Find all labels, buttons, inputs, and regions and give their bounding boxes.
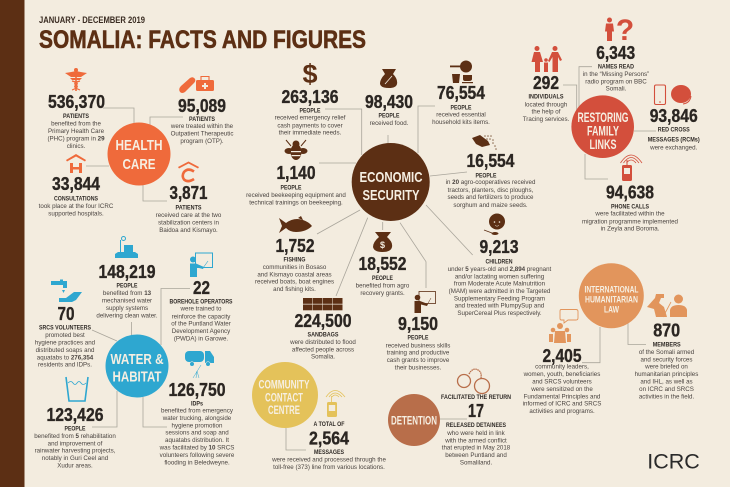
icon: phone and speech bubbles [654, 85, 691, 104]
stat: 9,213 children: from Moderate Acute Malnutrition [454, 281, 546, 288]
stat: 93,846 red cross messages: were exchanged. [649, 145, 698, 152]
icon: sandbags [303, 298, 342, 310]
stat: 22 borehole operators: were trained to [180, 306, 222, 313]
stat: 16,554 people: seeds and fertilizers to produce [448, 194, 534, 201]
stat: 2,405 community leaders: 2,405 [542, 346, 582, 366]
stat: 2,405 community leaders: women, youth, beneficiaries [523, 371, 600, 378]
stat: 1,752 fishing: 1,752 [276, 236, 314, 256]
stat: 870 members: and security forces [641, 356, 692, 363]
stat: 18,552 people: benefited from agro [356, 283, 410, 290]
stat: 16,554 people: sorghum and maize seeds. [453, 202, 528, 209]
stat: 536,370 patients [47, 92, 105, 150]
stat: 17 released detainees: who were held in link [446, 430, 506, 437]
stat: 870 members: 870 [653, 320, 680, 340]
stat: 536,370 patients: Primary Health Care [48, 128, 105, 135]
stat: 148,219 people: PEOPLE [116, 282, 138, 290]
stat: 536,370 patients: (PHC) program in 29 [47, 136, 105, 142]
stat: 870 members: on ICRC and SRCS [639, 386, 694, 393]
stat: 93,846 red cross messages: 93,846 [650, 106, 698, 126]
stat: 1,752 fishing: received boats, boat engines [255, 279, 334, 286]
stat: 2,405 community leaders: community leaders, [535, 364, 589, 371]
stat: 9,213 children: CHILDREN [486, 258, 513, 266]
stat: 126,750 IDPs: volunteers following severe [160, 452, 235, 459]
stat: 3,871 patients: PATIENTS [176, 204, 202, 212]
stat: 9,213 children: (MAM) were admitted in the Targeted [449, 288, 551, 295]
stat: 870 members: activities in the field. [639, 393, 694, 400]
stat: 94,638 phone calls: migration programme implemented [582, 218, 679, 225]
icon: mobile phone signal [326, 390, 345, 417]
panel: detention [388, 369, 511, 467]
stat: 536,370 patients: 536,370 [48, 92, 105, 112]
stat: 1,752 fishing [255, 236, 334, 293]
stat: 3,871 patients: 3,871 [170, 183, 208, 203]
stat: 16,554 people: PEOPLE [476, 172, 497, 180]
icon: tap and hand [51, 280, 82, 302]
stat: 9,213 children: and/or lactating women suffering [455, 273, 545, 280]
stat: 76,554 people: household kits items. [432, 119, 490, 126]
community contact centre circle: CONTACT [265, 390, 303, 404]
icon: trainer at board [190, 253, 212, 277]
stat: 536,370 patients: benefited from the [51, 120, 101, 128]
stat: 2,405 community leaders: Fundamental Principles and [524, 393, 601, 400]
stat: 263,136 people: 263,136 [282, 87, 338, 107]
stat: 2,564 messages: toll-free (373) line from various locations. [273, 464, 385, 471]
stat: 94,638 phone calls: were facilitated within the [594, 211, 665, 218]
restoring family links circle [571, 95, 634, 158]
stat: 95,089 patients: program (OTP). [180, 138, 224, 145]
ICRC logo text: ICRC [647, 450, 700, 474]
icon: business trainer [414, 292, 436, 313]
water and habitat circle: HABITAT [112, 370, 162, 386]
stat: 9,213 children: Supplementary Feeding Program [454, 295, 545, 302]
icon: hospital H [66, 154, 86, 173]
economic security circle [352, 143, 430, 221]
stat: 148,219 people: 148,219 [98, 262, 156, 282]
stat: 70 SRCS volunteers: promoted best [45, 332, 85, 339]
panel: economic security [246, 59, 552, 371]
stat: 1,140 people: received beekeeping equipment and [246, 192, 346, 199]
stat: 123,426 people: PEOPLE [64, 426, 86, 432]
stat: 16,554 people: 16,554 [466, 151, 514, 171]
stat: 2,405 community leaders: informed of ICRC and SRCS [523, 401, 601, 408]
stat: 70 SRCS volunteers: aquatabs to 276,354 [37, 354, 94, 361]
stat: 1,140 people: 1,140 [276, 163, 316, 183]
restoring family links circle: RESTORING [578, 110, 628, 125]
stat: 148,219 people: mechanised water [102, 298, 152, 305]
stat: 93,846 red cross messages: MESSAGES (RCMs) [648, 136, 700, 144]
stat: 22 borehole operators [170, 278, 233, 342]
stat: 870 members: humanitarian principles [635, 371, 698, 378]
icon: fish [279, 216, 312, 233]
stat: 3,871 patients: received care at the two [156, 212, 222, 219]
stat: 22 borehole operators: BOREHOLE OPERATORS [170, 298, 233, 306]
stat: 126,750 IDPs [159, 380, 235, 466]
stat: 70 SRCS volunteers [35, 304, 96, 369]
stat: 22 borehole operators: of the Puntland Water [171, 321, 231, 328]
international humanitarian law circle: INTERNATIONAL [584, 284, 639, 294]
stat: 224,500 sandbags: 224,500 [294, 311, 352, 331]
stat: 94,638 phone calls [582, 182, 679, 233]
stat: 9,150 people: PEOPLE [408, 334, 429, 342]
stat: 33,844 consultations: supported hospitals. [48, 210, 104, 218]
stat: 93,846 red cross messages: RED CROSS [658, 126, 690, 134]
stat: 263,136 people: cash payments to cover [277, 122, 343, 129]
stat: 33,844 consultations: 33,844 [52, 174, 100, 194]
stat: 536,370 patients: PATIENTS [63, 113, 89, 120]
stat: 126,750 IDPs: flooding in Beledweyne. [164, 459, 230, 466]
stat: 292 individuals: Tracing services. [523, 116, 570, 123]
stat: 126,750 IDPs: hygiene promotion [172, 422, 223, 429]
stat: 1,140 people: technical trainings on beekeeping. [249, 200, 343, 207]
stat: 292 individuals: the help of [532, 109, 561, 116]
stat: 70 SRCS volunteers: residents and IDPs. [38, 362, 92, 369]
stat: 126,750 IDPs: was facilitated by 10 SRCS [159, 445, 234, 452]
icon: child with spoon [484, 214, 505, 235]
stat: 9,213 children: SuperCereal Plus respectively. [457, 310, 542, 317]
icon: water truck [185, 351, 214, 378]
international humanitarian law circle: LAW [604, 304, 620, 314]
stat: 2,564 messages: 2,564 [309, 428, 349, 448]
stat: 98,430 people [365, 92, 413, 127]
stat: 224,500 sandbags: SANDBAGS [308, 332, 339, 338]
stat: 6,343 names read: radio program on BBC [585, 78, 647, 85]
stat: 17 released detainees: between Puntland and [445, 452, 507, 459]
stat: 9,150 people: training and productive [387, 350, 450, 357]
title: SOMALIA: FACTS AND FIGURES [39, 26, 366, 54]
stat: 2,564 messages [271, 421, 386, 471]
icon: crowd and speech bubble [549, 310, 578, 343]
icon: bee [284, 140, 308, 160]
icon: dollar sign: $ [302, 59, 318, 89]
stat: 9,213 children [448, 237, 552, 317]
stat: 6,343 names read: NAMES READ [598, 64, 634, 70]
stat: 95,089 patients: 95,089 [178, 96, 226, 116]
stat: 9,150 people: cash grants to improve [387, 357, 450, 364]
stat: 17 released detainees: with the armed conflict [444, 437, 507, 444]
stat: 263,136 people: PEOPLE [300, 108, 321, 114]
stat: 9,213 children: 9,213 [480, 237, 518, 257]
stat: 9,150 people: their businesses. [395, 364, 441, 371]
stat: 126,750 IDPs: 126,750 [168, 380, 226, 400]
stat: 2,564 messages: MESSAGES [314, 449, 344, 456]
stat: 17 released detainees: Somaliland. [460, 460, 492, 467]
stat: 126,750 IDPs: aquatabs distribution. It [165, 437, 229, 444]
stat: 2,405 community leaders: and SRCS volunteers [532, 378, 592, 385]
stat: 292 individuals: INDIVIDUALS [528, 94, 564, 100]
stat: 870 members: and IHL, as well as [640, 378, 693, 385]
stat: 292 individuals [523, 73, 570, 123]
stat: 224,500 sandbags [289, 311, 356, 361]
stat: 70 SRCS volunteers: distributed soaps and [36, 347, 95, 354]
icon: money bag [373, 232, 392, 252]
stat: 17 released detainees: FACILITATED THE RETURN [441, 394, 511, 401]
stat: 292 individuals: located through [525, 101, 568, 108]
stat: 3,871 patients: stabilization centers in [158, 220, 219, 226]
stat: 123,426 people: 123,426 [46, 405, 104, 425]
stat: 17 released detainees: that erupted in May 2018 [442, 445, 511, 452]
stat: 33,844 consultations: CONSULTATIONS [54, 196, 98, 202]
stat: 224,500 sandbags: Somalia. [311, 354, 335, 361]
stat: 263,136 people: their immediate needs. [279, 130, 342, 137]
stat: 123,426 people: notably in Guri Ceel and [42, 455, 109, 462]
stat: 6,343 names read: in the “Missing Persons” [583, 71, 649, 78]
icon: mobile signal [620, 155, 642, 181]
community contact centre circle: COMMUNITY [258, 378, 310, 392]
stat: 263,136 people: received emergency relief [275, 115, 346, 122]
community contact centre circle: CENTRE [268, 403, 300, 417]
stat: 9,213 children: and treated with PlumpySup and [455, 303, 545, 310]
stat: 123,426 people [34, 405, 116, 470]
water and habitat circle: WATER & [110, 352, 164, 368]
stat: 76,554 people: PEOPLE [450, 104, 472, 112]
stat: 98,430 people: PEOPLE [378, 112, 400, 120]
stat: 18,552 people [356, 254, 410, 297]
icon: glass of water [66, 377, 88, 401]
stat: 16,554 people: tractors, planters, disc ploughs, [448, 187, 534, 194]
stat: 9,150 people: 9,150 [398, 314, 438, 334]
stat: 76,554 people [432, 83, 490, 126]
stat: 148,219 people: benefited from 13 [103, 290, 152, 297]
panel: international humanitarian law [523, 263, 698, 415]
stat: 95,089 patients: Outpatient Therapeutic [171, 130, 233, 138]
stat: 70 SRCS volunteers: hygiene practices and [35, 340, 96, 347]
stat: 126,750 IDPs: sessions and soap and [165, 430, 229, 437]
stat: 22 borehole operators: 22 [193, 278, 210, 298]
stat: 1,752 fishing: FISHING [284, 256, 306, 264]
icon: stabilization centre C [178, 162, 199, 181]
icon: water tank and cup [115, 236, 138, 258]
stat: 148,219 people: delivering clean water. [96, 313, 158, 320]
stat: 18,552 people: 18,552 [358, 254, 406, 274]
stat: 224,500 sandbags: affected people across [292, 346, 354, 353]
stat: 123,426 people: and improvement of [48, 440, 103, 447]
stat: 2,405 community leaders [523, 346, 601, 415]
icon: money bag: $ [380, 240, 385, 250]
stat: 18,552 people: recovery grants. [360, 290, 405, 297]
stat: 148,219 people: supply systems [106, 305, 148, 312]
icon: household kit [450, 60, 473, 83]
icon: hand and grains [472, 135, 497, 150]
stat: 95,089 patients: PATIENTS [189, 116, 215, 123]
stat: 94,638 phone calls: PHONE CALLS [611, 204, 649, 210]
health care circle [108, 122, 170, 186]
stat: 33,844 consultations [39, 174, 114, 218]
stat: 16,554 people: in 20 agro-cooperatives received [446, 179, 536, 186]
panel: restoring family links [523, 14, 700, 233]
stat: 3,871 patients [156, 183, 222, 234]
stat: 9,213 children: under 5 years-old and 2,894 pregnant [448, 266, 552, 273]
stat: 870 members: of the Somali armed [639, 349, 695, 356]
stat: 536,370 patients: clinics. [67, 143, 86, 150]
stat: 17 released detainees: RELEASED DETAINEES [446, 422, 506, 429]
stat: 1,752 fishing: communities in Bosaso [263, 264, 327, 271]
stat: 123,426 people: benefited from 5 rehabilitation [34, 433, 116, 440]
stat: 870 members [635, 320, 698, 400]
community contact centre circle [252, 362, 318, 428]
stat: 1,140 people: PEOPLE [280, 184, 302, 192]
stat: 22 borehole operators: Development Agency [172, 328, 231, 335]
stat: 17 released detainees [441, 394, 511, 467]
health care circle: HEALTH [116, 137, 162, 154]
stat: 22 borehole operators: (PWDA) in Garowe. [174, 335, 228, 342]
restoring family links circle: LINKS [590, 137, 616, 152]
stat: 17 released detainees: 17 [468, 401, 484, 421]
stat: 126,750 IDPs: water trucking, alongside [162, 415, 232, 422]
health care circle: CARE [122, 156, 156, 173]
stat: 292 individuals: 292 [533, 73, 559, 93]
stat: 123,426 people: Xudur areas. [57, 463, 93, 470]
panel: water and habitat [34, 236, 235, 470]
stat: 94,638 phone calls: in Zeyla and Boroma. [601, 226, 660, 233]
detention circle: DETENTION [391, 414, 437, 428]
stat: 1,140 people [246, 163, 346, 207]
stat: 1,752 fishing: and Kismayo coastal areas [257, 271, 332, 278]
icon: pill and first aid kit [179, 76, 214, 93]
connector lines [86, 67, 656, 450]
restoring family links circle: FAMILY [587, 124, 619, 138]
water and habitat circle [106, 334, 168, 398]
stat: 263,136 people [275, 87, 346, 137]
icon: handcuffs [458, 369, 490, 394]
icon: soldier and person [647, 294, 687, 317]
stat: 70 SRCS volunteers: SRCS VOLUNTEERS [39, 324, 91, 332]
stat: 6,343 names read: 6,343 [596, 43, 635, 63]
icon: caduceus [65, 68, 87, 91]
stat: 148,219 people [96, 262, 158, 320]
stat: 70 SRCS volunteers: 70 [58, 304, 74, 324]
stat: 2,564 messages: A TOTAL OF [314, 421, 344, 428]
icon: food sack [380, 69, 397, 88]
stat: 95,089 patients [170, 96, 234, 145]
economic security circle: ECONOMIC [360, 169, 423, 186]
stat: 224,500 sandbags: were distributed to flood [289, 339, 356, 346]
date heading: JANUARY - DECEMBER 2019 [39, 15, 145, 26]
stat: 94,638 phone calls: 94,638 [606, 182, 654, 202]
stat: 870 members: MEMBERS [653, 342, 681, 348]
stat: 9,150 people [386, 314, 450, 371]
international humanitarian law circle [579, 263, 644, 328]
stat: 76,554 people: 76,554 [437, 83, 485, 103]
stat: 2,564 messages: were received and processed through the [271, 456, 386, 463]
stat: 2,405 community leaders: activities and programs. [529, 408, 595, 415]
icon: person and question mark [605, 14, 634, 47]
stat: 6,343 names read [583, 43, 649, 93]
stat: 1,752 fishing: and fishing kits. [273, 286, 316, 293]
icon: person and question mark: ? [616, 14, 634, 47]
stat: 18,552 people: PEOPLE [372, 275, 393, 282]
panel: health care [39, 68, 234, 234]
stat: 6,343 names read: Somali. [606, 86, 627, 93]
stat: 3,871 patients: Baidoa and Kismayo. [159, 227, 218, 234]
panel: community contact centre [252, 362, 386, 471]
stat: 93,846 red cross messages [648, 106, 700, 152]
icon: family [532, 46, 562, 72]
economic security circle: SECURITY [362, 187, 420, 204]
stat: 2,405 community leaders: were sensitized on the [530, 386, 593, 393]
stat: 98,430 people: received food. [370, 120, 409, 127]
stat: 98,430 people: 98,430 [365, 92, 413, 112]
international humanitarian law circle: HUMANITARIAN [585, 294, 638, 304]
stat: 22 borehole operators: reinforce the capacity [172, 313, 231, 320]
stat: 870 members: were briefed on [644, 364, 688, 371]
stat: 33,844 consultations: took place at the four ICRC [39, 203, 114, 210]
stat: 123,426 people: rainwater harvesting projects, [35, 448, 116, 455]
stat: 76,554 people: received essential [436, 112, 486, 119]
stat: 16,554 people [446, 151, 536, 209]
stat: 126,750 IDPs: IDPs [191, 400, 203, 408]
stat: 126,750 IDPs: benefited from emergency [161, 408, 234, 415]
stat: 9,150 people: received business skills [386, 342, 450, 349]
stat: 95,089 patients: were treated within the [170, 123, 234, 130]
